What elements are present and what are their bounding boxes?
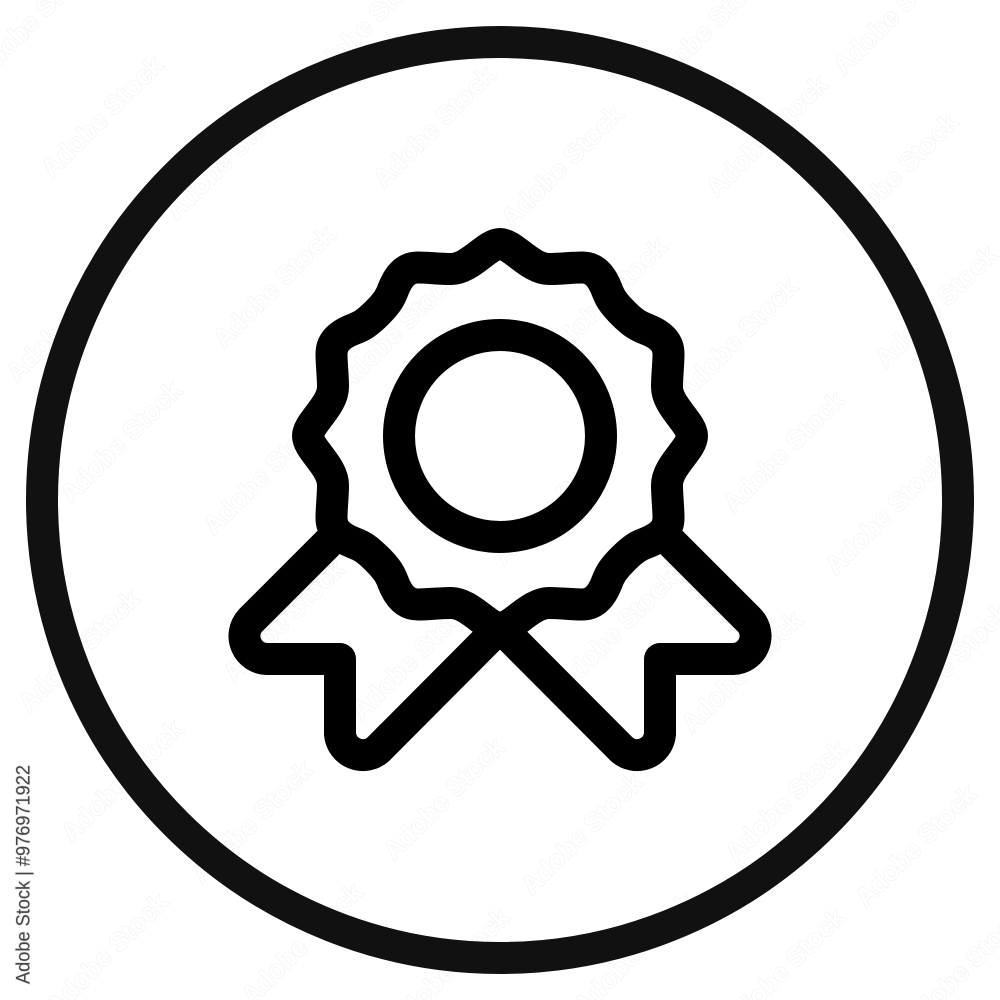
watermark pattern: Adobe Stock <box>719 733 853 867</box>
watermark pattern: Adobe Stock <box>515 766 649 900</box>
watermark pattern: Adobe Stock <box>217 553 351 687</box>
watermark pattern: Adobe Stock <box>377 731 511 865</box>
watermark pattern: Adobe Stock <box>549 563 683 697</box>
inner circle <box>399 335 601 537</box>
watermark pattern: Adobe Stock <box>207 219 341 353</box>
watermark pattern: Adobe Stock <box>185 754 319 888</box>
watermark pattern: Adobe Stock <box>160 91 294 225</box>
watermark pattern: Adobe Stock <box>345 591 479 725</box>
watermark pattern: Adobe Stock <box>849 778 983 912</box>
watermark pattern: Adobe Stock <box>330 263 464 397</box>
watermark pattern: Adobe Stock <box>35 49 169 183</box>
watermark pattern: Adobe Stock <box>487 436 621 570</box>
stock credit text: Adobe Stock | #976971922 <box>14 765 34 984</box>
watermark pattern: Adobe Stock <box>700 68 834 202</box>
watermark pattern: Adobe Stock <box>55 713 189 847</box>
watermark pattern: Adobe Stock <box>367 59 501 193</box>
icon: award badge <box>244 244 756 755</box>
watermark pattern: Adobe Stock <box>12 583 146 717</box>
watermark pattern: Adobe Stock <box>54 374 188 508</box>
left ribbon <box>244 537 500 755</box>
watermark pattern: Adobe Stock <box>819 446 953 580</box>
watermark pattern: Adobe Stock <box>670 271 804 405</box>
watermark pattern: Adobe Stock <box>869 239 1000 373</box>
watermark pattern: Adobe Stock <box>197 406 331 540</box>
watermark pattern: Adobe Stock <box>495 98 629 232</box>
watermark pattern: Adobe Stock <box>717 384 851 518</box>
watermark pattern: Adobe Stock <box>0 253 134 387</box>
watermark pattern: Adobe Stock <box>830 106 964 240</box>
scalloped seal <box>308 244 692 628</box>
watermark pattern: Adobe Stock <box>539 231 673 365</box>
watermark pattern: Adobe Stock <box>675 604 809 738</box>
right ribbon <box>500 537 756 755</box>
